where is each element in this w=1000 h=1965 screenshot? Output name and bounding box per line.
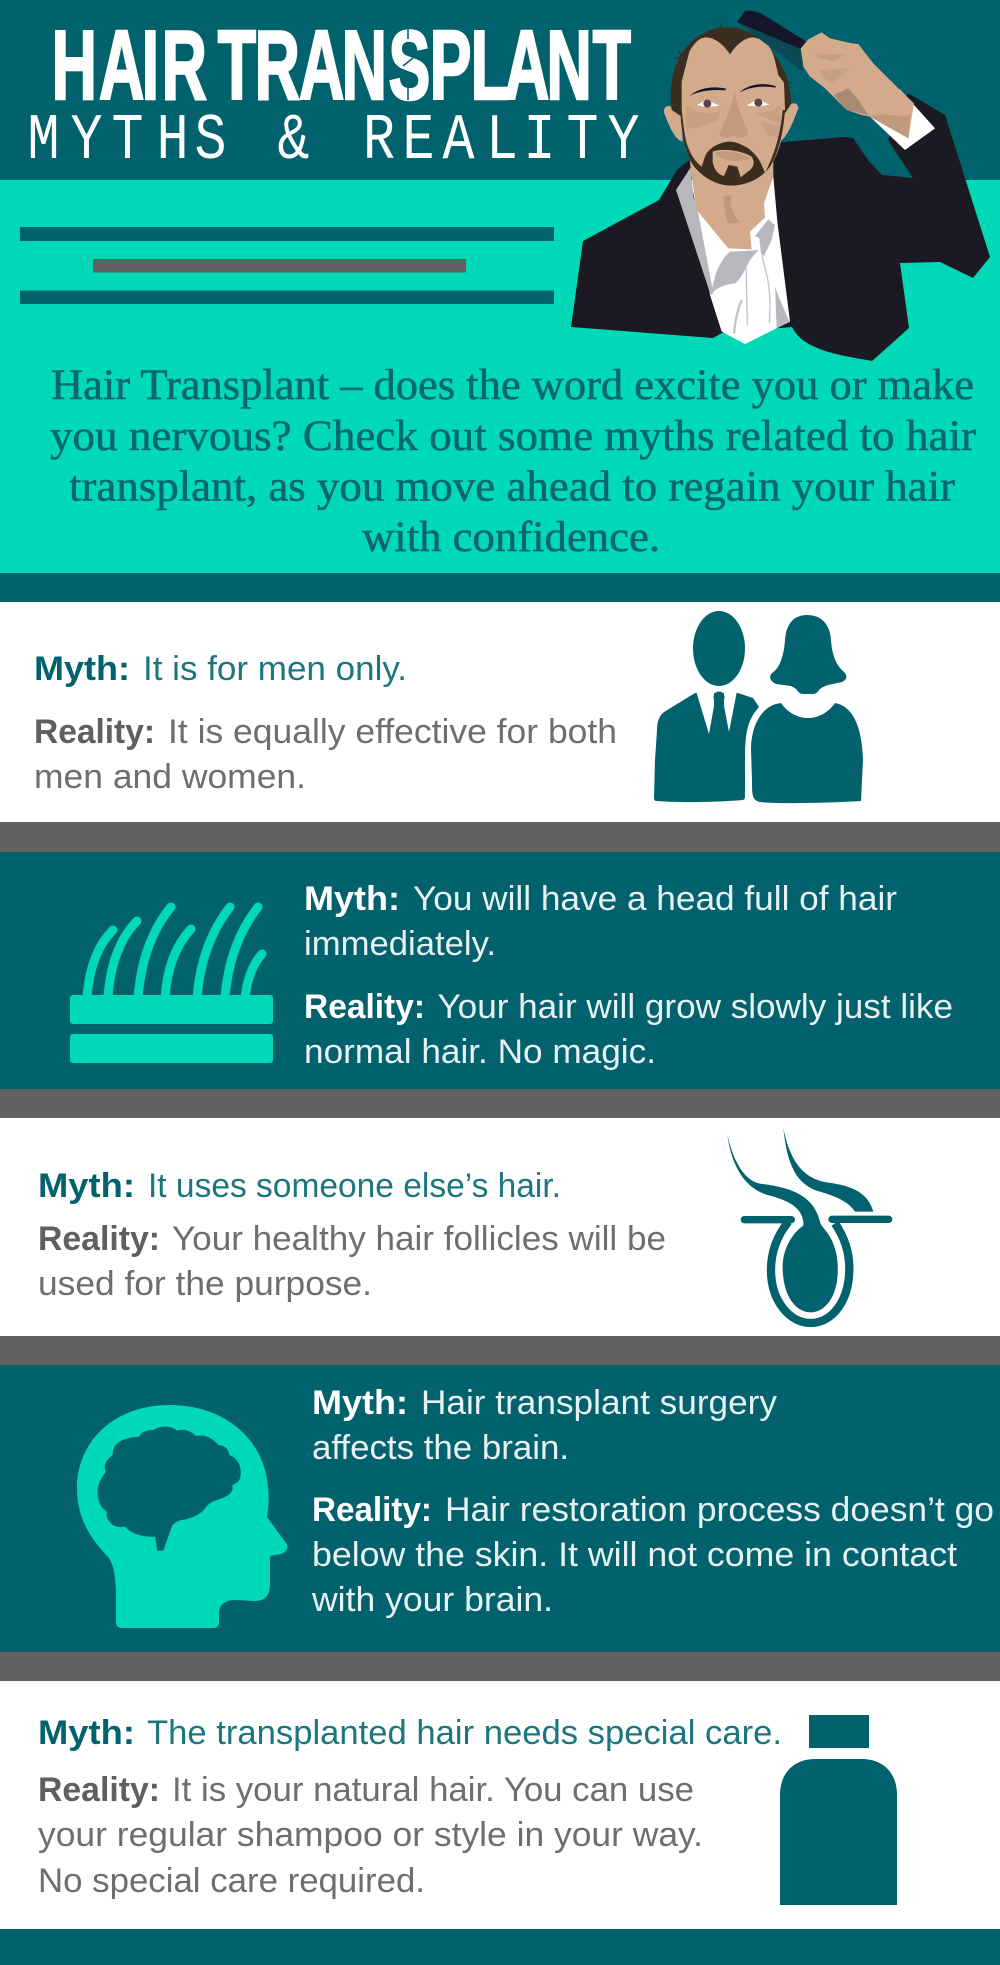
icon: head with brain bbox=[77, 1405, 287, 1628]
separator band bbox=[0, 573, 1000, 602]
cuff bbox=[870, 89, 935, 150]
myth text: The transplanted hair needs special care. bbox=[147, 1714, 782, 1752]
man head bbox=[693, 611, 745, 686]
panel: myth 2 immediate hair bbox=[0, 852, 1000, 1089]
separator band bbox=[0, 1089, 1000, 1118]
ears bbox=[664, 103, 798, 142]
shirt fold bbox=[712, 250, 758, 293]
woman body bbox=[751, 703, 863, 803]
myth text: Myth: bbox=[304, 880, 400, 918]
icon: man and woman bbox=[654, 611, 863, 803]
header dark band bbox=[0, 0, 1000, 180]
myth text: Myth: bbox=[38, 1714, 135, 1752]
header green panel bbox=[0, 180, 1000, 573]
myth text bbox=[304, 880, 897, 963]
myth text: Hair transplant surgery bbox=[421, 1384, 777, 1422]
reality text bbox=[304, 988, 953, 1071]
panel: myth 1 men only bbox=[0, 602, 1000, 822]
shirt and neck bbox=[676, 160, 790, 344]
intro paragraph bbox=[50, 362, 976, 561]
icon: hair strands on scalp bbox=[70, 907, 273, 1063]
reality text: Reality: bbox=[38, 1771, 160, 1809]
reality text: below the skin. It will not come in contact bbox=[312, 1536, 958, 1574]
reality text bbox=[311, 1491, 994, 1619]
header panel bbox=[0, 0, 1000, 573]
wrist shadow bbox=[870, 113, 911, 138]
reality text: Reality: bbox=[38, 1220, 160, 1258]
head bbox=[664, 23, 798, 186]
reality text bbox=[38, 1220, 666, 1303]
man body bbox=[654, 693, 759, 802]
reality text: Reality: bbox=[34, 713, 155, 751]
myth text bbox=[34, 650, 407, 688]
eyes bbox=[697, 99, 769, 108]
panel background bbox=[0, 852, 1000, 1089]
intro paragraph: Hair Transplant – does the word excite you or make bbox=[51, 362, 974, 409]
reality text: normal hair. No magic. bbox=[304, 1033, 656, 1071]
panel background bbox=[0, 1365, 1000, 1652]
panel background bbox=[0, 1118, 1000, 1336]
second hair bbox=[783, 1128, 873, 1212]
myth text: immediately. bbox=[304, 925, 496, 963]
title: hair transplant: HAIR TRANSPLANT bbox=[52, 12, 631, 120]
hair tufts bbox=[674, 23, 792, 83]
panel: myth 5 special care bbox=[0, 1681, 1000, 1929]
separator band bbox=[0, 1652, 1000, 1681]
footer band bbox=[0, 1929, 1000, 1965]
reality text: Reality: bbox=[304, 988, 425, 1026]
follicle sac bbox=[771, 1222, 849, 1323]
decorative bars bbox=[20, 227, 554, 304]
panel background bbox=[0, 602, 1000, 822]
thumb shadow bbox=[834, 88, 868, 115]
reality text: used for the purpose. bbox=[38, 1265, 372, 1303]
icon: hair follicle bbox=[727, 1128, 892, 1323]
myth text bbox=[312, 1384, 777, 1467]
right shirt shade bbox=[775, 287, 789, 328]
panel background bbox=[0, 1681, 1000, 1929]
hand and cuff bbox=[801, 32, 935, 150]
separator band bbox=[0, 822, 1000, 852]
skin lines bbox=[741, 1216, 795, 1223]
reality text bbox=[34, 713, 617, 796]
grey collar bbox=[676, 167, 713, 295]
hair and bulb bbox=[727, 1134, 838, 1312]
reality text: It is equally effective for both bbox=[168, 713, 617, 751]
jacket bbox=[571, 93, 990, 361]
hand bbox=[801, 32, 914, 138]
beard bbox=[681, 110, 785, 186]
woman hair bbox=[770, 615, 846, 694]
reality text: No special care required. bbox=[38, 1862, 425, 1900]
myth text: It is for men only. bbox=[143, 650, 407, 688]
neck skin bbox=[690, 160, 773, 249]
cheek shading bbox=[686, 105, 782, 138]
illustration: man combing hair bbox=[571, 11, 990, 361]
intro paragraph: with confidence. bbox=[362, 514, 660, 561]
reality text: Hair restoration process doesn’t go bbox=[445, 1491, 994, 1529]
reality text: Your healthy hair follicles will be bbox=[172, 1220, 666, 1258]
white shirt bbox=[691, 177, 790, 344]
chin and lip bbox=[713, 150, 754, 177]
panel: myth 3 someone else's hair bbox=[0, 1118, 1000, 1336]
panel: myth 4 affects the brain bbox=[0, 1365, 1000, 1652]
icon: shampoo bottle bbox=[780, 1715, 897, 1905]
intro paragraph: you nervous? Check out some myths related to hair bbox=[50, 413, 976, 460]
reality text: Your hair will grow slowly just like bbox=[438, 988, 953, 1026]
myth text: Myth: bbox=[34, 650, 130, 688]
reality text: men and women. bbox=[34, 758, 306, 796]
myth text: affects the brain. bbox=[312, 1429, 569, 1467]
myth text: Myth: bbox=[312, 1384, 408, 1422]
finger shading bbox=[813, 53, 850, 83]
collar flap bbox=[755, 219, 775, 256]
subtitle: myths and reality: MYTHS & REALITY bbox=[27, 104, 640, 178]
myth text: You will have a head full of hair bbox=[413, 880, 897, 918]
separator band bbox=[0, 1336, 1000, 1365]
reality text: your regular shampoo or style in your way. bbox=[38, 1816, 703, 1854]
neck shadow bbox=[723, 195, 740, 223]
face bbox=[682, 37, 785, 185]
reality text: Reality: bbox=[312, 1491, 432, 1529]
reality text bbox=[38, 1771, 703, 1900]
myth text: It uses someone else’s hair. bbox=[148, 1167, 561, 1205]
reality text: with your brain. bbox=[311, 1581, 553, 1619]
reality text: It is your natural hair. You can use bbox=[172, 1771, 694, 1809]
shirt gaps and tie bbox=[696, 691, 737, 734]
hair bbox=[671, 27, 791, 117]
comb bbox=[737, 11, 807, 72]
intro paragraph: transplant, as you move ahead to regain your hair bbox=[69, 464, 955, 510]
eyebrows bbox=[689, 84, 776, 96]
nose bbox=[719, 92, 748, 137]
myth text: Myth: bbox=[38, 1167, 135, 1205]
shirt crease lines bbox=[746, 255, 770, 325]
